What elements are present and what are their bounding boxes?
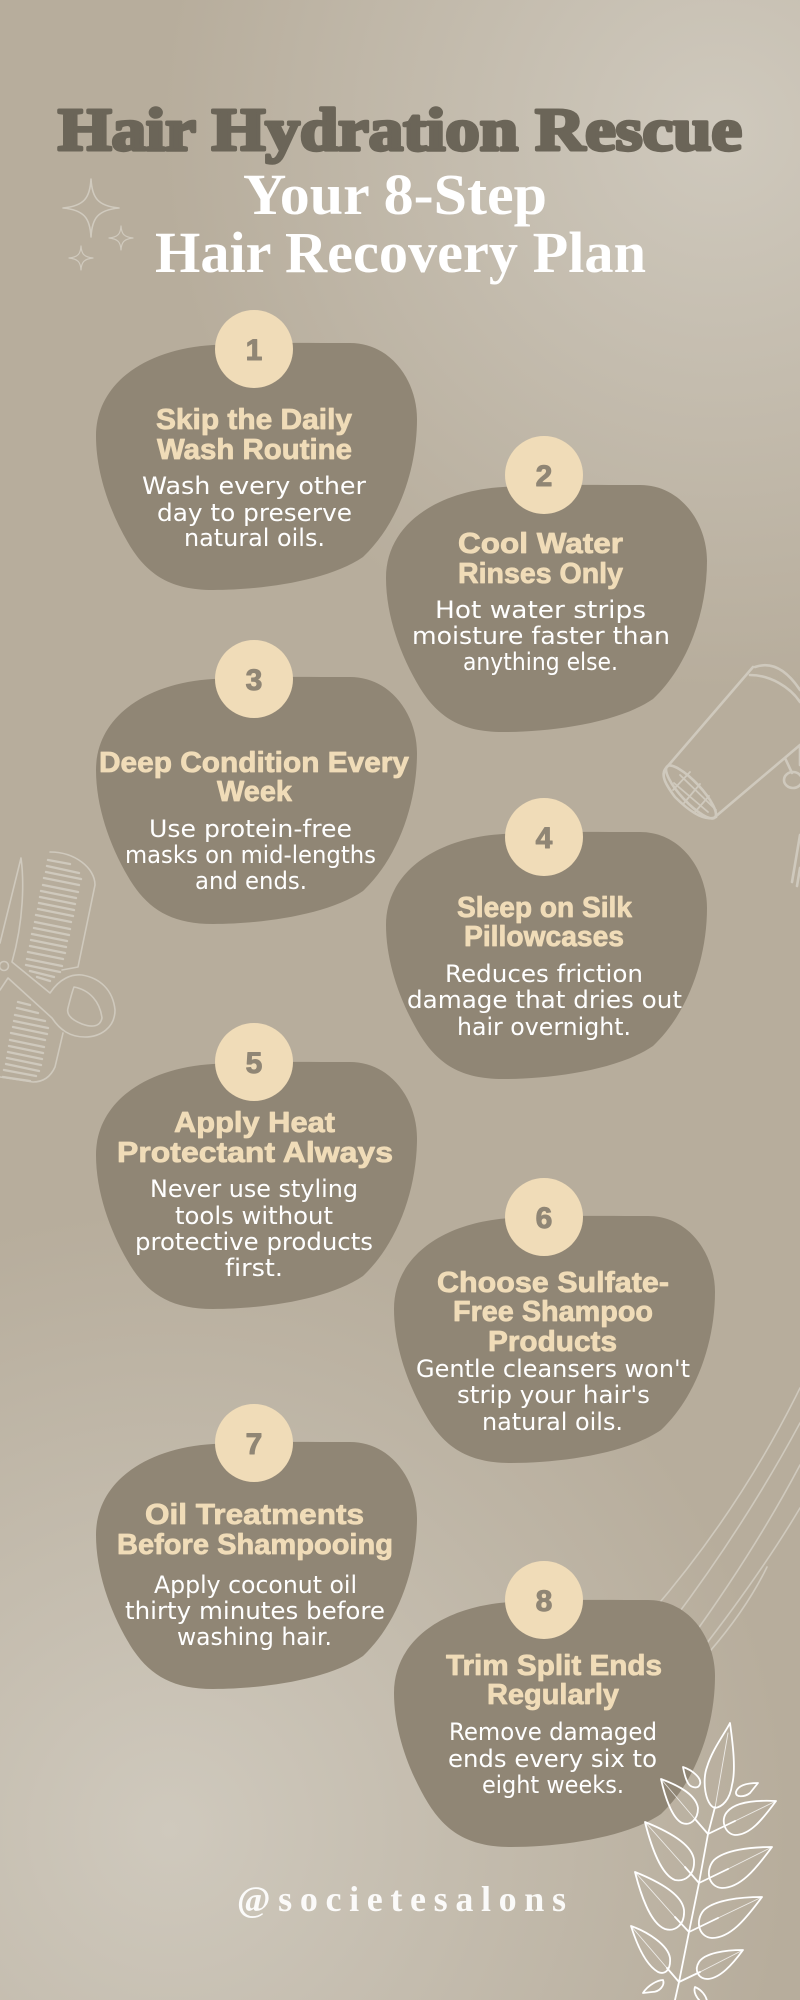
heading 5 [117, 1107, 393, 1169]
number badge 8 [505, 1561, 583, 1639]
heading 6 [437, 1267, 669, 1358]
heading 1: Skip the Daily [156, 404, 352, 436]
number badge 5 [215, 1023, 293, 1101]
body 5: tools without [175, 1202, 333, 1230]
body 5: protective products [135, 1228, 373, 1256]
heading 3: Deep Condition Every [99, 747, 409, 779]
body 1: Wash every other [142, 472, 366, 500]
scissors [0, 858, 115, 1037]
body 2 [412, 596, 670, 676]
heading 8 [446, 1650, 662, 1711]
heading 1 [156, 404, 352, 466]
body 3: and ends. [195, 867, 307, 895]
decoration: curved hair strands [650, 1388, 800, 1658]
body 4: hair overnight. [457, 1013, 631, 1041]
number badge 4 [505, 798, 583, 876]
body 4: damage that dries out [407, 986, 682, 1014]
body 7 [125, 1571, 385, 1651]
body 6 [416, 1355, 690, 1436]
heading 8: Regularly [487, 1679, 619, 1711]
body 6: natural oils. [482, 1408, 623, 1436]
body 1 [142, 472, 366, 552]
number badge 7: 7 [246, 1428, 262, 1461]
subtitle: Your 8-Step [243, 162, 547, 227]
number badge 3: 3 [246, 664, 262, 697]
title: Hair Hydration Rescue [58, 97, 742, 163]
body 5: Never use styling [150, 1175, 358, 1203]
body 7: washing hair. [177, 1623, 332, 1651]
body 2: anything else. [463, 648, 618, 676]
icon: comb and scissors [0, 852, 115, 1082]
heading 2 [458, 528, 623, 590]
subtitle: Hair Recovery Plan [155, 220, 646, 285]
number badge 8: 8 [536, 1585, 552, 1618]
body 3 [125, 815, 376, 895]
icon: leaf branch [631, 1723, 776, 2000]
panel: step 6 [394, 1178, 715, 1463]
number badge 2: 2 [536, 460, 552, 493]
panel: step 3 [96, 640, 417, 924]
heading 2: Rinses Only [458, 558, 623, 590]
number badge 4: 4 [536, 822, 553, 855]
heading 6: Free Shampoo [453, 1296, 653, 1328]
subtitle [155, 162, 646, 285]
body 5: first. [225, 1254, 283, 1282]
heading 4: Pillowcases [464, 921, 624, 953]
body 8: ends every six to [448, 1745, 657, 1773]
number badge 6: 6 [536, 1202, 552, 1235]
heading 6: Choose Sulfate- [437, 1267, 669, 1299]
body 1: natural oils. [184, 524, 325, 552]
number badge 1: 1 [246, 334, 262, 367]
heading 7 [117, 1499, 393, 1561]
body 8: Remove damaged [449, 1718, 657, 1746]
heading 7: Oil Treatments [145, 1499, 364, 1531]
heading 3 [99, 747, 409, 808]
number badge 7 [215, 1404, 293, 1482]
upper comb [26, 852, 95, 981]
lower comb [0, 1002, 63, 1082]
body 2: moisture faster than [412, 622, 670, 650]
panel: step 1 [96, 310, 417, 590]
number badge 5: 5 [246, 1047, 262, 1080]
number badge 3 [215, 640, 293, 718]
icon: hair dryer [660, 665, 800, 886]
number badge 2 [505, 436, 583, 514]
heading 4: Sleep on Silk [457, 892, 633, 924]
panel: step 5 [96, 1023, 417, 1309]
heading 2: Cool Water [458, 528, 623, 560]
body 4: Reduces friction [445, 960, 643, 988]
body 8 [448, 1718, 657, 1799]
number badge 6 [505, 1178, 583, 1256]
body 3: Use protein-free [149, 815, 352, 843]
body 2: Hot water strips [435, 596, 646, 624]
panel: step 7 [96, 1404, 417, 1689]
body 3: masks on mid-lengths [125, 841, 376, 869]
panel: step 8 [394, 1561, 715, 1847]
heading 7: Before Shampooing [117, 1529, 393, 1561]
body 5 [135, 1175, 373, 1282]
body 7: thirty minutes before [125, 1597, 385, 1625]
body 6: strip your hair's [457, 1381, 650, 1409]
body 6: Gentle cleansers won't [416, 1355, 690, 1383]
number badge 1 [215, 310, 293, 388]
panel: step 4 [386, 798, 707, 1079]
heading 4 [457, 892, 633, 953]
body 7: Apply coconut oil [154, 1571, 357, 1599]
heading 1: Wash Routine [157, 434, 352, 466]
heading 8: Trim Split Ends [446, 1650, 662, 1682]
footer handle: @societesalons [237, 1879, 566, 1919]
body 4 [407, 960, 682, 1041]
body 8: eight weeks. [482, 1771, 624, 1799]
heading 5: Apply Heat [174, 1107, 335, 1139]
panel: step 2 [386, 436, 707, 732]
heading 5: Protectant Always [117, 1137, 393, 1169]
heading 3: Week [217, 776, 293, 808]
icon: sparkles [63, 179, 133, 270]
body 1: day to preserve [157, 499, 352, 527]
heading 6: Products [488, 1326, 617, 1358]
